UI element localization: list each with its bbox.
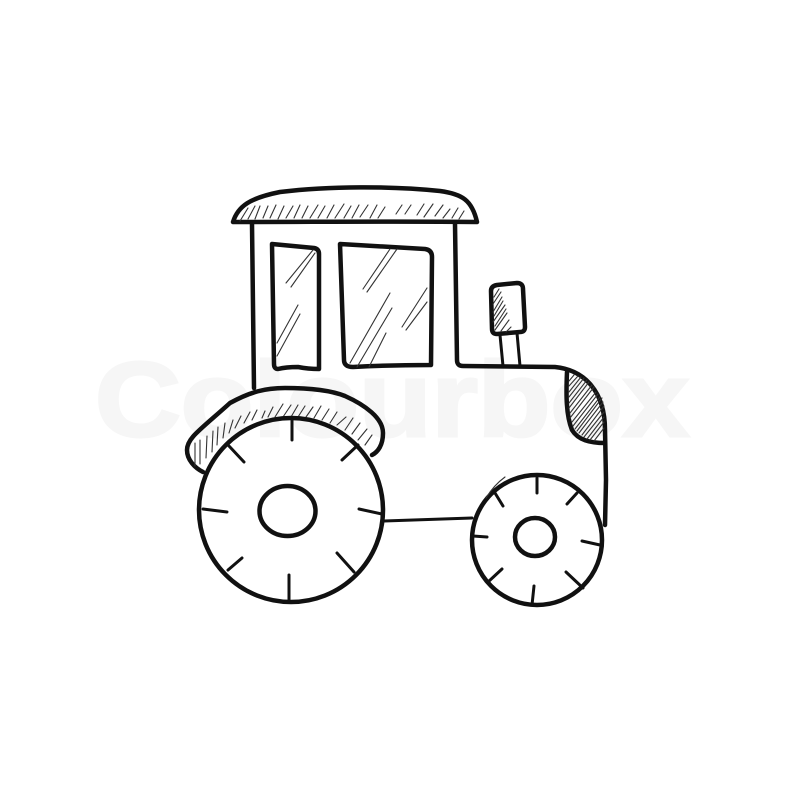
exhaust stack [491,283,525,366]
right window [340,244,432,367]
front hub [515,518,555,556]
rear spokes [203,420,382,600]
rear tyre [199,418,383,602]
front wheel [472,475,602,605]
headlight [567,372,605,443]
hood outline [455,224,606,525]
tractor cab [233,187,477,388]
rear wheel and fender [187,388,383,602]
front tyre [472,475,602,605]
cab roof [233,187,477,222]
watermark text: Colourbox [95,341,689,459]
tractor hood [384,224,606,525]
cab walls [252,224,254,388]
front tyre sketch line [486,477,505,498]
axle [384,518,472,521]
rear fender [187,388,383,472]
rear hub [260,486,316,536]
front spokes [473,478,600,605]
left window [272,244,319,369]
